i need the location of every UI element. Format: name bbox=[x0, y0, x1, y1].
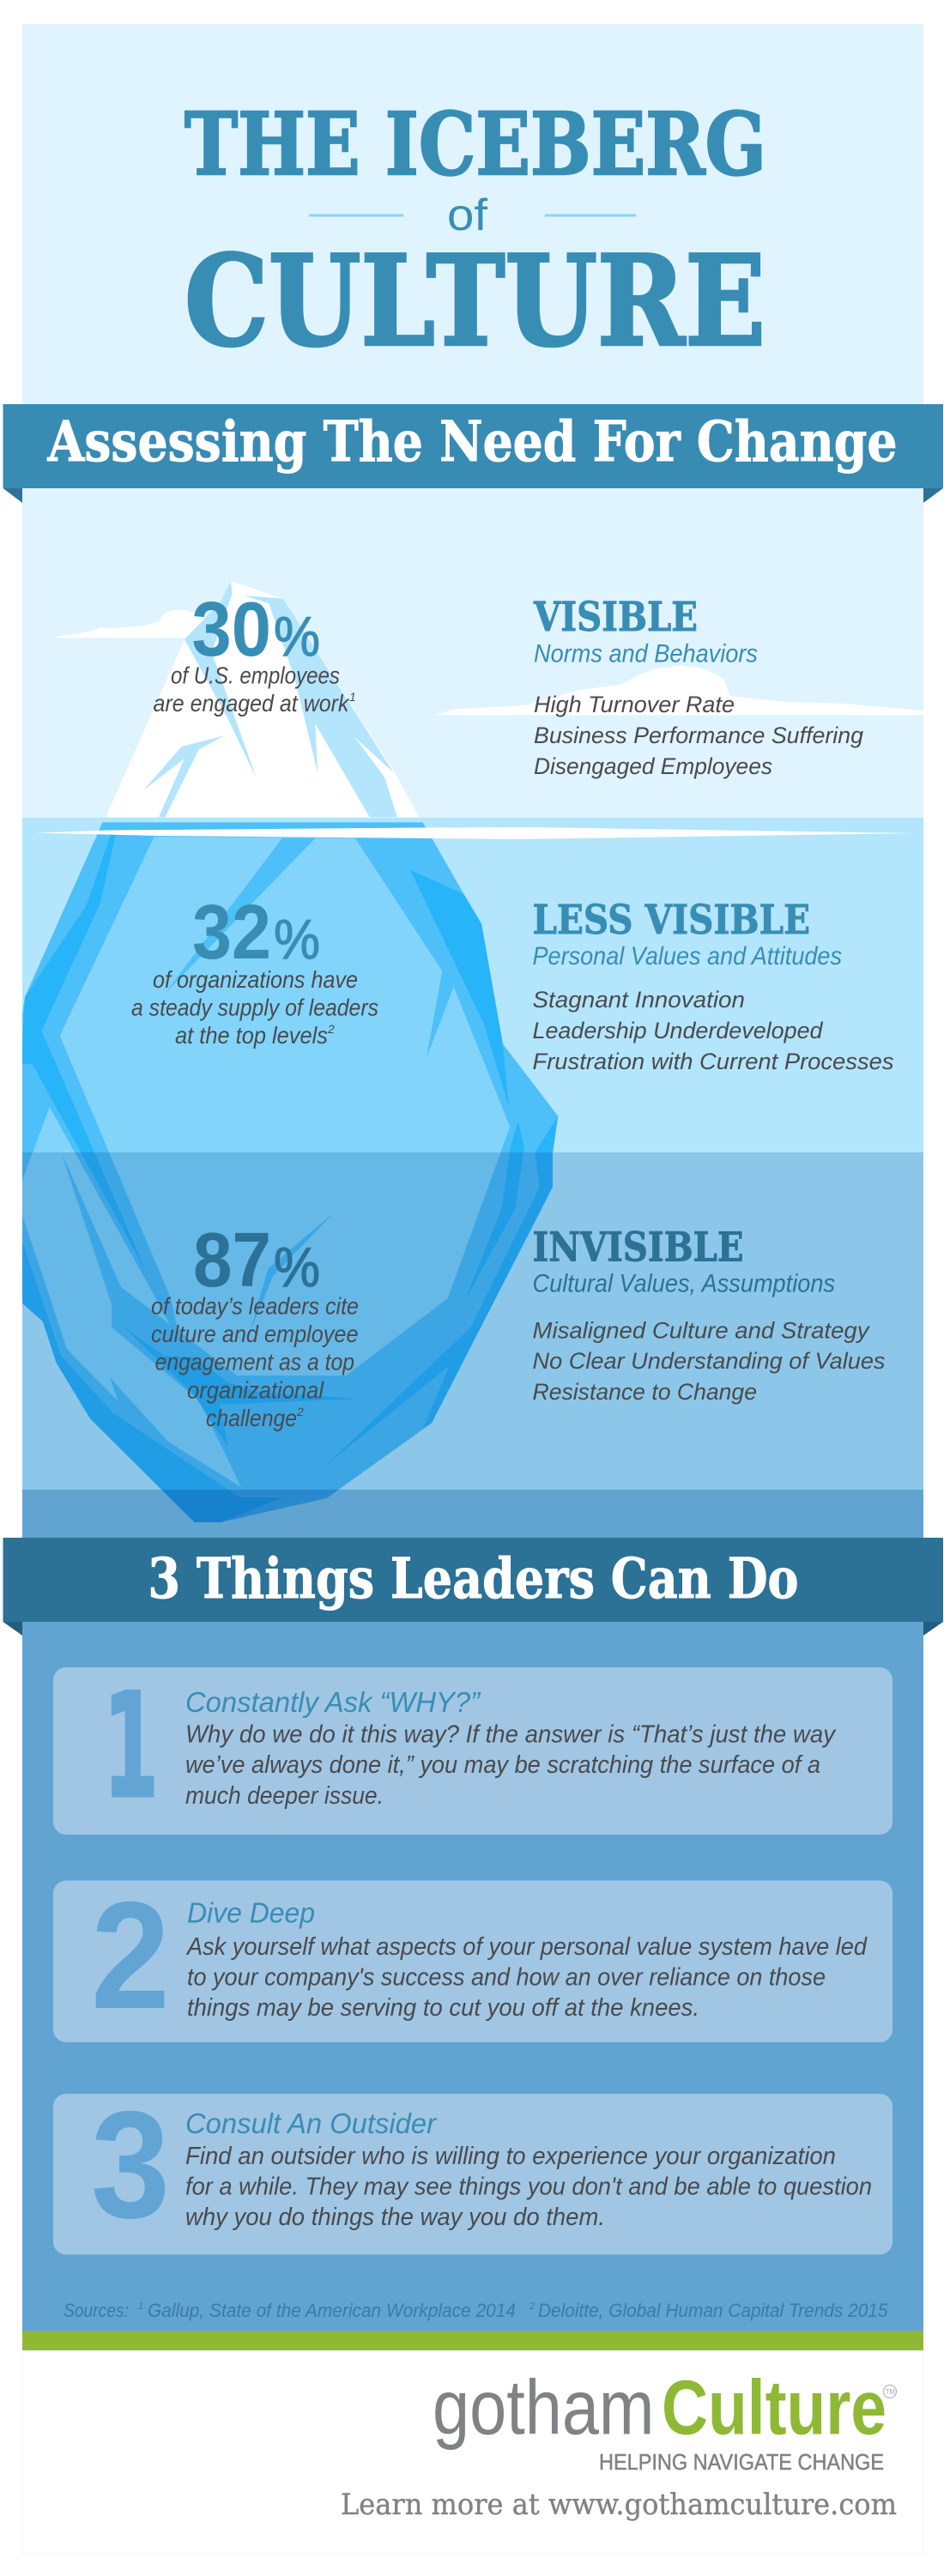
stat: 87%: organizational bbox=[187, 1377, 324, 1404]
stat: 30%: are engaged at work bbox=[153, 690, 350, 717]
title line: CULTURE: CULTURE bbox=[185, 228, 765, 374]
section: VISIBLE: Disengaged Employees bbox=[534, 753, 772, 779]
panel: water background bbox=[22, 818, 923, 1547]
cloud: left bbox=[57, 610, 203, 638]
tagline: HELPING NAVIGATE CHANGE bbox=[599, 2451, 884, 2475]
sources bbox=[64, 2300, 888, 2321]
card 1 bbox=[53, 1662, 893, 1835]
title bbox=[185, 94, 766, 374]
card 2 body: Ask yourself what aspects of your personal value system have led bbox=[185, 1933, 868, 1961]
number 1: 1 bbox=[103, 1662, 159, 1830]
card 3 heading: Consult An Outsider bbox=[185, 2108, 438, 2140]
stat: 87%: challenge bbox=[206, 1405, 297, 1431]
banner: 3 Things Leaders Can Do: 3 Things Leaders Can Do bbox=[148, 1546, 798, 1612]
card 1 body: much deeper issue. bbox=[185, 1782, 384, 1810]
stat: 32%: a steady supply of leaders bbox=[131, 994, 378, 1021]
cloud: right bbox=[435, 665, 923, 715]
number 3: 3 bbox=[91, 2079, 170, 2250]
stat: 32%: 2 bbox=[327, 1022, 335, 1036]
title line: THE ICEBERG: THE ICEBERG bbox=[185, 94, 766, 195]
sources: Sources: bbox=[64, 2300, 129, 2321]
sources: Gallup, State of the American Workplace 2014 bbox=[148, 2300, 516, 2321]
stat: 87%: 2 bbox=[296, 1405, 304, 1418]
section: LESS VISIBLE: LESS VISIBLE bbox=[532, 897, 810, 944]
section: VISIBLE: Norms and Behaviors bbox=[534, 640, 758, 668]
panel: deep water background bbox=[22, 1545, 923, 2331]
section: LESS VISIBLE: Stagnant Innovation bbox=[532, 987, 745, 1013]
card 1 body: we’ve always done it,” you may be scratching the surface of a bbox=[185, 1751, 820, 1779]
section: VISIBLE: VISIBLE bbox=[533, 594, 698, 641]
section: INVISIBLE bbox=[532, 1224, 886, 1405]
stat: 87%: 87 bbox=[193, 1218, 271, 1303]
stat: 87%: of today’s leaders cite bbox=[151, 1293, 359, 1320]
stat: 32%: % bbox=[274, 908, 320, 971]
card 1 heading: Constantly Ask “WHY?” bbox=[185, 1687, 481, 1719]
stat: 87% bbox=[151, 1218, 359, 1431]
logo: gothamCulture bbox=[433, 2365, 896, 2451]
logo: gothamCulture: gotham bbox=[433, 2365, 654, 2451]
banner: Assessing The Need For Change bbox=[3, 404, 943, 503]
section: VISIBLE: High Turnover Rate bbox=[534, 692, 735, 717]
stat: 30%: of U.S. employees bbox=[171, 662, 340, 689]
call to action: Learn more at www.gothamculture.com bbox=[341, 2488, 897, 2522]
panel: sky background bbox=[22, 24, 923, 818]
section: INVISIBLE: Misaligned Culture and Strategy bbox=[532, 1317, 870, 1343]
card 1 body bbox=[185, 1720, 836, 1810]
section: VISIBLE bbox=[533, 594, 863, 779]
card 3 body bbox=[185, 2143, 872, 2231]
card 3 body: why you do things the way you do them. bbox=[185, 2204, 605, 2231]
stat: 87%: engagement as a top bbox=[155, 1349, 354, 1375]
section: INVISIBLE: INVISIBLE bbox=[532, 1224, 743, 1272]
card 1 body: Why do we do it this way? If the answer is “That’s just the way bbox=[185, 1720, 836, 1748]
stat: 30%: % bbox=[274, 605, 320, 668]
number 2: 2 bbox=[91, 1870, 170, 2041]
section: INVISIBLE: No Clear Understanding of Values bbox=[532, 1348, 886, 1374]
card 2 heading: Dive Deep bbox=[187, 1898, 315, 1930]
card 2 body: to your company's success and how an over reliance on those bbox=[187, 1963, 826, 1991]
logo: gothamCulture: Culture bbox=[662, 2365, 887, 2451]
stat: 32% bbox=[131, 890, 378, 1049]
stat: 32%: of organizations have bbox=[153, 966, 358, 993]
sources: Deloitte, Global Human Capital Trends 2015 bbox=[538, 2300, 888, 2321]
green bar bbox=[22, 2331, 923, 2351]
sources: 2 bbox=[529, 2301, 535, 2312]
sources: 1 bbox=[138, 2301, 143, 2312]
stat: 87%: culture and employee bbox=[151, 1321, 359, 1347]
card 2 body bbox=[185, 1933, 868, 2022]
depth shading: deep zone bbox=[22, 1490, 923, 1545]
waterline highlight bbox=[35, 827, 915, 839]
card 2 bbox=[53, 1870, 893, 2042]
stat: 30%: 30 bbox=[192, 587, 271, 673]
section: LESS VISIBLE: Leadership Underdeveloped bbox=[532, 1018, 823, 1043]
card 2 body: things may be serving to cut you off at the knees. bbox=[187, 1994, 699, 2022]
section: LESS VISIBLE: Frustration with Current Processes bbox=[532, 1049, 894, 1074]
card 3 bbox=[53, 2079, 893, 2255]
iceberg underwater body bbox=[17, 822, 558, 1522]
section: INVISIBLE: Resistance to Change bbox=[532, 1379, 757, 1405]
stat: 32%: 32 bbox=[192, 890, 271, 976]
depth shading: invisible zone bbox=[22, 1152, 923, 1490]
banner: 3 Things Leaders Can Do bbox=[3, 1538, 943, 1636]
stat: 30%: 1 bbox=[349, 690, 356, 704]
card 3 body: for a while. They may see things you don't and be able to question bbox=[185, 2174, 872, 2201]
stat: 87%: % bbox=[274, 1236, 320, 1298]
section: INVISIBLE: Cultural Values, Assumptions bbox=[532, 1270, 835, 1298]
stat: 30% bbox=[153, 587, 356, 717]
title line: of: of bbox=[447, 190, 488, 240]
iceberg bbox=[17, 581, 558, 1522]
footer panel bbox=[22, 2351, 923, 2554]
section: VISIBLE: Business Performance Suffering bbox=[534, 723, 863, 748]
iceberg tip bbox=[106, 581, 419, 817]
stat: 32%: at the top levels bbox=[175, 1022, 328, 1049]
section: LESS VISIBLE bbox=[532, 897, 894, 1074]
section: LESS VISIBLE: Personal Values and Attitudes bbox=[532, 942, 842, 971]
logo: gothamCulture: TM bbox=[886, 2388, 895, 2396]
card 3 body: Find an outsider who is willing to experience your organization bbox=[185, 2143, 836, 2170]
